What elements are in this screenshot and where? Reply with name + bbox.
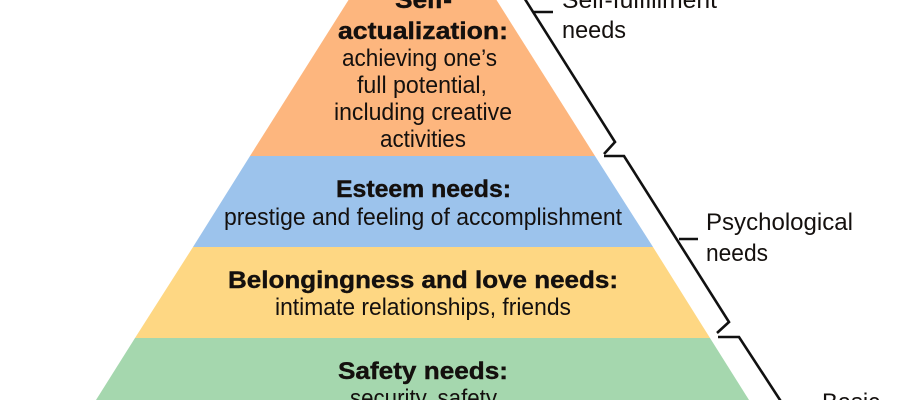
panel: self-actualization tier: actualization: (338, 18, 508, 45)
panel: esteem tier: Esteem needs: (336, 176, 511, 203)
panel: belongingness tier: intimate relationships, friends (275, 294, 571, 321)
bracket: self-fulfillment needs (523, 0, 717, 154)
bracket: self-fulfillment needs: needs (562, 17, 626, 44)
panel: esteem tier: prestige and feeling of accomplishment (224, 204, 622, 231)
bracket: psychological needs: Psychological (706, 209, 853, 236)
panel: self-actualization tier: activities (380, 126, 466, 153)
panel: self-actualization tier: including creative (334, 99, 512, 126)
panel: belongingness tier: Belongingness and love needs: (228, 267, 618, 294)
panel: safety tier: Safety needs: (338, 358, 508, 385)
panel: self-actualization tier: full potential, (357, 72, 487, 99)
bracket: psychological needs: needs (706, 240, 768, 267)
panel: self-actualization tier: achieving one’s (342, 45, 497, 72)
panel: esteem tier (193, 156, 653, 247)
bracket: psychological needs (604, 156, 853, 333)
panel: self-actualization tier (250, 0, 595, 156)
panel: belongingness tier (135, 247, 710, 338)
panel: safety tier (96, 338, 749, 400)
bracket: basic needs (718, 337, 880, 400)
pyramid (96, 0, 749, 400)
